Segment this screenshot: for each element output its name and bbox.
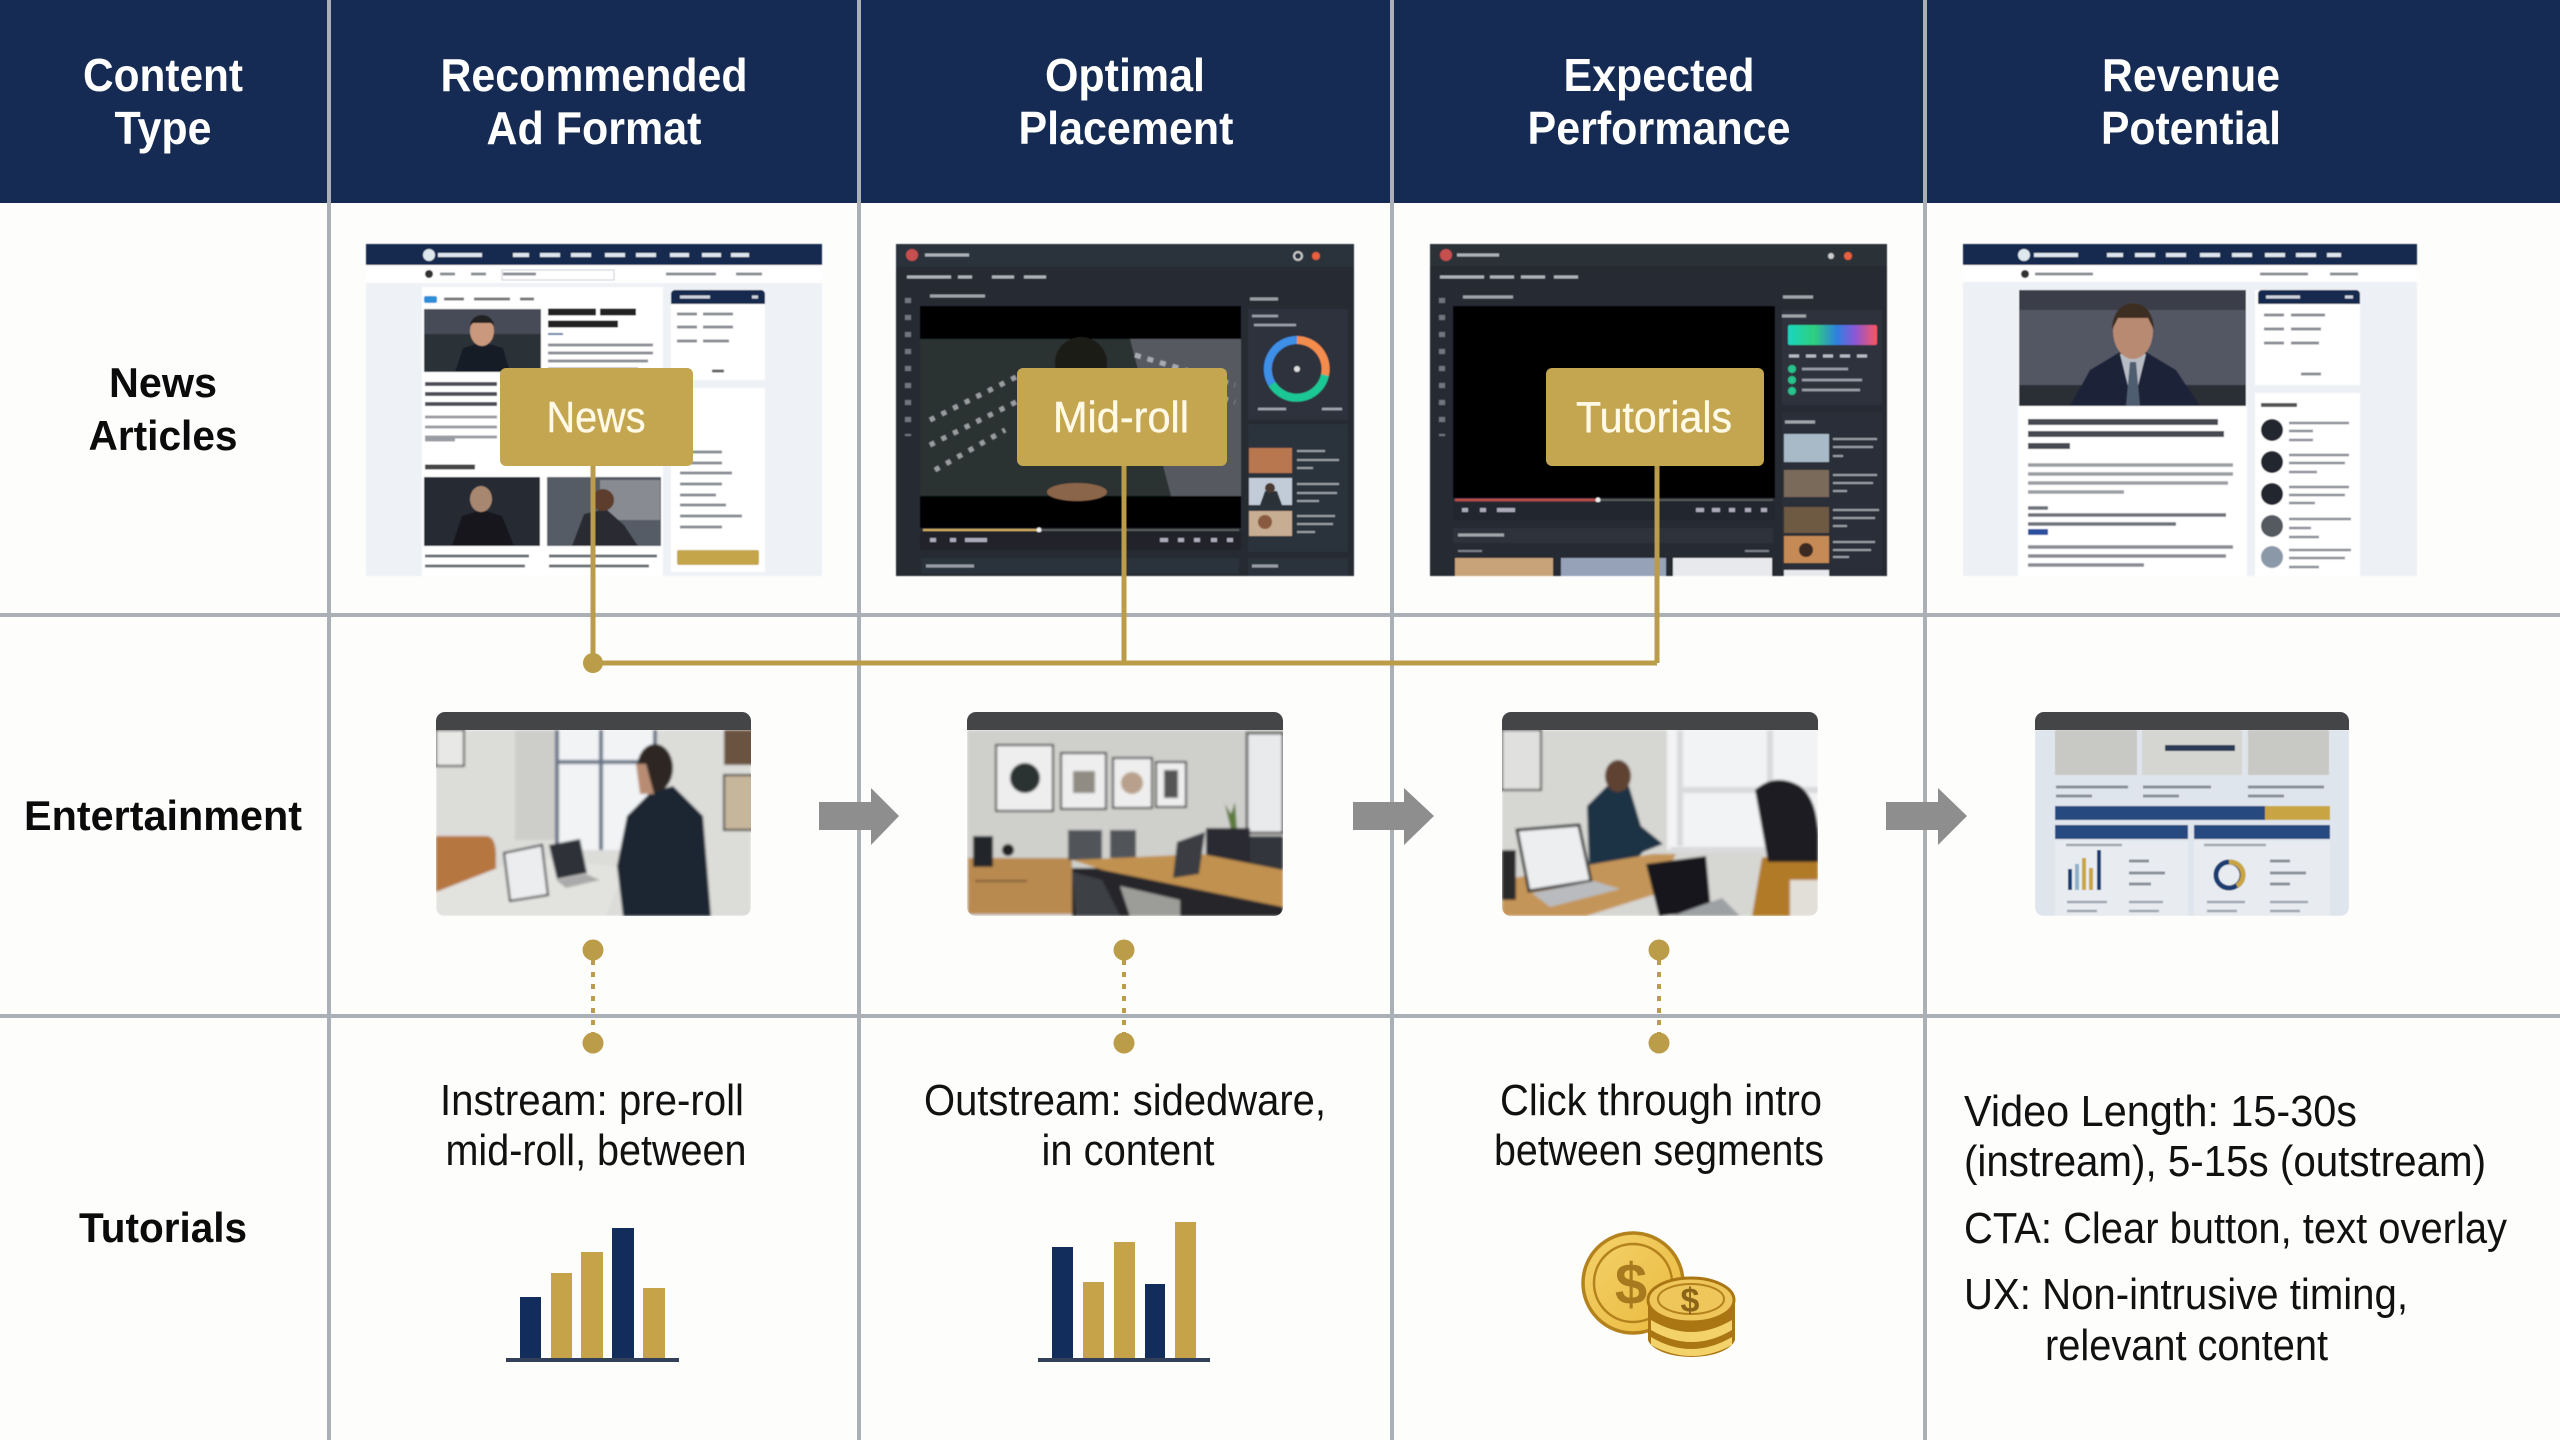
text: best practices: (instream), 5-15s (outstream): [1964, 1137, 2486, 1186]
text: instream: [440, 1076, 746, 1175]
photo: two people with laptops: [1502, 712, 1818, 916]
text: best practices: [1964, 1087, 2507, 1370]
text: outstream: [924, 1076, 1326, 1175]
screenshot: dark tutorial player with gradient: [1430, 244, 1887, 576]
article column: [2018, 290, 2247, 576]
text: instream: Instream: pre-roll: [440, 1076, 744, 1125]
text: best practices: UX: Non-intrusive timing,: [1964, 1270, 2408, 1319]
screenshot: dark video player with color wheel: [896, 244, 1354, 576]
heading: Content Type: Type: [114, 102, 212, 154]
black video area: [1453, 306, 1775, 502]
heading: Optimal Placement: Placement: [1018, 102, 1234, 154]
dotted connector column 3: [1114, 940, 1134, 1054]
color wheel panel: [1248, 299, 1348, 420]
screenshot: news site: [366, 244, 822, 576]
bar chart 2: [1038, 1222, 1210, 1362]
icon: gold coins: $: [1615, 1252, 1647, 1317]
heading: Expected Performance: [1528, 49, 1790, 154]
label: News: News: [546, 393, 646, 442]
icon: gold coins: $: [1681, 1282, 1700, 1320]
text: instream: mid-roll, between: [446, 1126, 746, 1175]
heading: Optimal Placement: Optimal: [1045, 49, 1205, 101]
row label: News Articles: News: [109, 359, 217, 406]
dotted connector column 4: [1648, 940, 1670, 1054]
arrow 1: [819, 788, 899, 845]
tutorial thumbnails: [1782, 412, 1882, 576]
icon: gold coins: [1583, 1233, 1735, 1357]
text: best practices: Video Length: 15-30s: [1964, 1087, 2357, 1136]
photo: man at laptops: [436, 712, 754, 916]
text: click through: between segments: [1494, 1126, 1824, 1175]
news main column: [422, 287, 663, 576]
video frame: [920, 306, 1241, 532]
row label: Tutorials: Tutorials: [79, 1204, 247, 1251]
suggested thumbnails: [1248, 424, 1348, 552]
row label: News Articles: [88, 359, 238, 459]
heading: Recommended Ad Format: Ad Format: [486, 102, 702, 154]
screenshot: revenue dashboard: [2035, 712, 2349, 916]
dotted connector column 2: [582, 940, 604, 1054]
text: best practices: CTA: Clear button, text overlay: [1964, 1204, 2507, 1253]
label: Mid-roll: [1017, 368, 1227, 466]
article sidebar: [2255, 290, 2360, 576]
heading: Content Type: [83, 49, 243, 154]
heading: Recommended Ad Format: [440, 49, 748, 154]
news sidebar: [671, 290, 765, 572]
gradient panel: [1782, 297, 1882, 405]
header band: [0, 0, 2560, 203]
photo: office with framed art: [967, 712, 1283, 916]
heading: Revenue Potential: Potential: [2101, 102, 2281, 154]
screenshot: news article with presenter: [1963, 244, 2417, 576]
arrow 3: [1886, 788, 1967, 845]
row label: News Articles: Articles: [88, 412, 238, 459]
text: best practices: relevant content: [2045, 1321, 2328, 1370]
text: outstream: in content: [1042, 1126, 1214, 1175]
dashboard bars: [2055, 806, 2330, 839]
heading: Revenue Potential: Revenue: [2102, 49, 2280, 101]
text: click through: [1494, 1076, 1824, 1175]
label: News: [500, 368, 693, 466]
text: outstream: Outstream: sidedware,: [924, 1076, 1326, 1125]
label: Mid-roll: Mid-roll: [1053, 393, 1189, 442]
row label: Entertainment: Entertainment: [24, 792, 302, 839]
label: Tutorials: Tutorials: [1576, 393, 1732, 442]
heading: Revenue Potential: [2101, 49, 2281, 154]
connector start dot: [583, 653, 603, 673]
heading: Expected Performance: Expected: [1564, 49, 1754, 101]
heading: Optimal Placement: [1018, 49, 1234, 154]
label: Tutorials: [1546, 368, 1764, 466]
heading: Recommended Ad Format: Recommended: [440, 49, 748, 101]
arrow 2: [1353, 788, 1434, 845]
bar chart 1: [506, 1228, 679, 1362]
connector lines: [593, 466, 1657, 663]
text: click through: Click through intro: [1500, 1076, 1822, 1125]
heading: Content Type: Content: [83, 49, 243, 101]
heading: Expected Performance: Performance: [1528, 102, 1790, 154]
